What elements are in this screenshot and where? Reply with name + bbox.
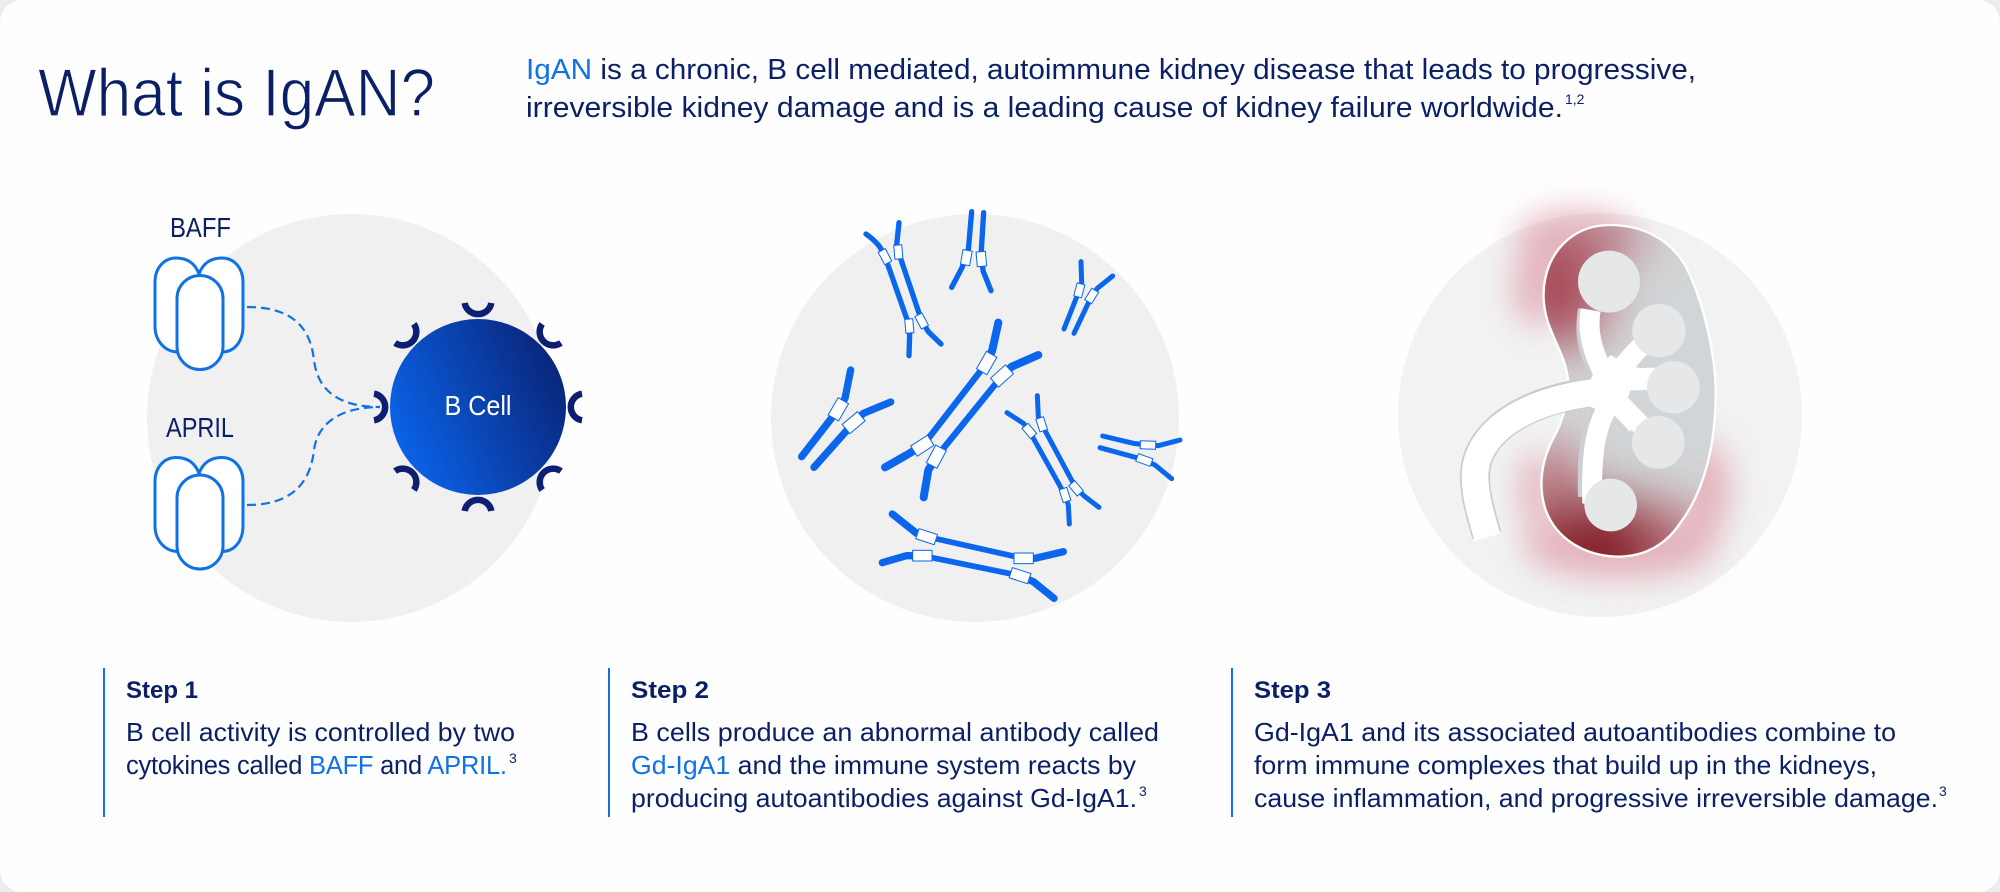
ureter and renal pelvis — [1475, 310, 1663, 537]
body: B cell activity is controlled by two — [126, 717, 515, 747]
panel: step 2 text — [608, 668, 1159, 817]
panel: step 3 text — [1231, 668, 1947, 817]
kidney — [1475, 210, 1730, 610]
antibody: centre large — [885, 323, 1038, 497]
background circle — [147, 214, 555, 622]
body: form immune complexes that build up in the kidneys, — [1254, 750, 1877, 780]
panel: step 3 illustration — [1398, 210, 1802, 617]
background circle — [1398, 213, 1802, 617]
antibody: right centre — [1007, 396, 1099, 524]
antibody: top centre — [952, 212, 991, 291]
intro text: irreversible kidney damage and is a leading cause of kidney failure worldwide. — [526, 92, 1563, 124]
panel: step 1 illustration — [147, 212, 582, 622]
antibody: far right — [1100, 436, 1180, 479]
body — [126, 717, 517, 780]
antibody: top left — [866, 223, 941, 356]
intro text — [526, 54, 1696, 124]
heading: Step 2 — [631, 677, 709, 704]
body — [1254, 717, 1947, 813]
body: cytokines called BAFF and APRIL. — [126, 752, 507, 780]
heading: Step 3 — [1254, 677, 1331, 704]
body: 3 — [1939, 783, 1947, 799]
body: Gd-IgA1 and its associated autoantibodies combine to — [1254, 717, 1896, 747]
body: B cells produce an abnormal antibody called — [631, 717, 1159, 747]
B cell — [374, 303, 582, 511]
intro text: 1,2 — [1565, 91, 1585, 107]
arrow: BAFF to B cell — [247, 307, 380, 407]
panel: step 2 illustration — [771, 212, 1180, 622]
body: cause inflammation, and progressive irreversible damage. — [1254, 783, 1938, 813]
body: Gd-IgA1 and the immune system reacts by — [631, 750, 1136, 780]
kidney body — [1541, 225, 1716, 557]
arrow: APRIL to B cell — [247, 407, 380, 505]
calyces — [1578, 251, 1700, 531]
body: producing autoantibodies against Gd-IgA1. — [631, 783, 1137, 813]
icon: APRIL trimer — [155, 458, 243, 569]
body — [631, 717, 1159, 813]
intro text: IgAN is a chronic, B cell mediated, autoimmune kidney disease that leads to progressive, — [526, 54, 1696, 86]
label: APRIL: APRIL — [166, 412, 234, 443]
antibody: left — [802, 370, 891, 467]
antibody: bottom — [882, 514, 1063, 598]
panel: step 1 text — [103, 668, 517, 817]
antibodies — [802, 212, 1180, 598]
kidney outline — [1541, 225, 1716, 557]
title: What is IgAN? — [38, 55, 435, 131]
body: 3 — [509, 750, 517, 766]
antibody: top right — [1064, 262, 1113, 333]
icon: BAFF trimer — [155, 258, 243, 370]
body: 3 — [1139, 783, 1147, 799]
inflammation glow — [1513, 210, 1730, 578]
heading: Step 1 — [126, 677, 198, 704]
inflamed tissue shading — [1542, 226, 1700, 556]
label: BAFF: BAFF — [170, 212, 231, 243]
B cell: B Cell — [444, 390, 512, 421]
background circle — [771, 214, 1179, 622]
